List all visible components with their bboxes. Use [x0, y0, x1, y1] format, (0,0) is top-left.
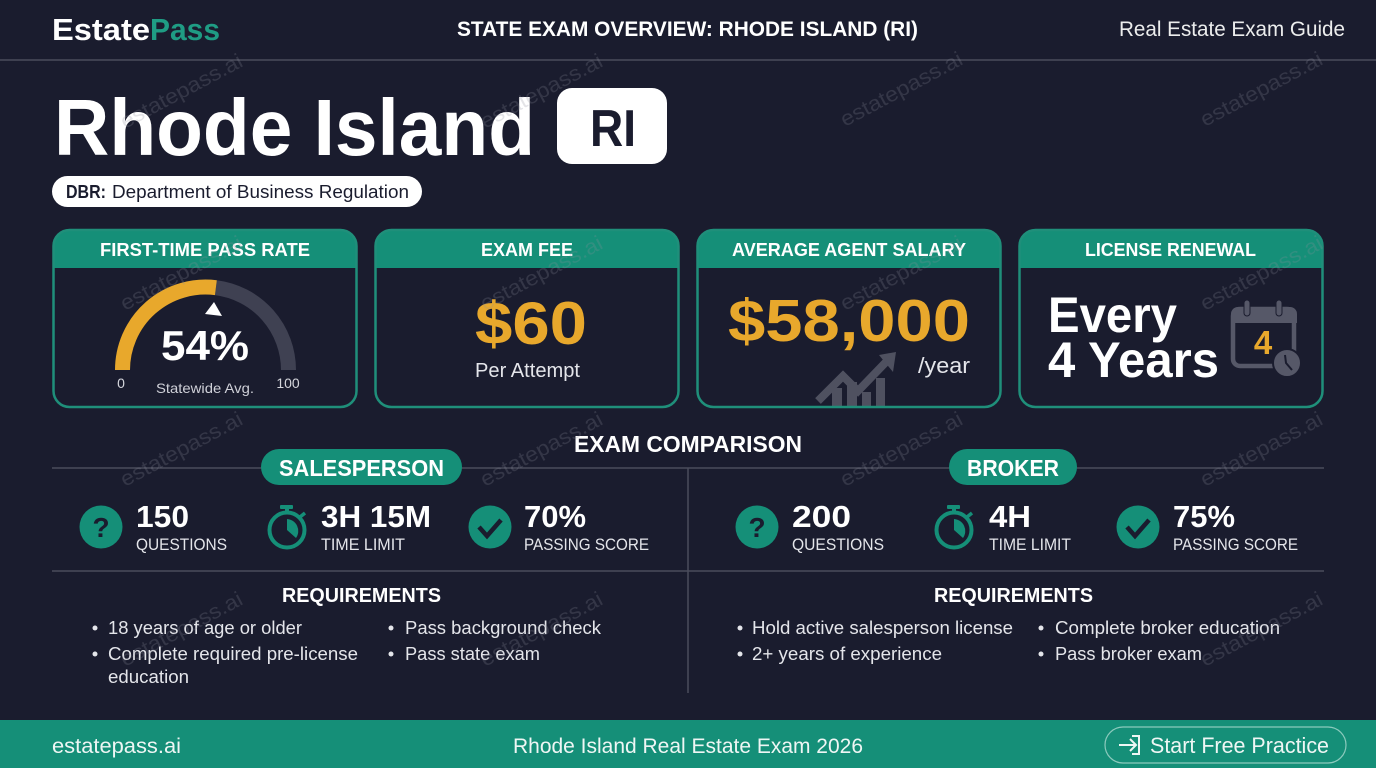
- state title: Rhode Island: [54, 83, 535, 172]
- stat: time limit: TIME LIMIT: [321, 535, 405, 554]
- panel heading: LICENSE RENEWAL: [1085, 240, 1256, 260]
- requirements list: Pass background check: [405, 618, 602, 638]
- watermarks: estatepass.ai: [117, 50, 247, 133]
- salesperson pill: [261, 449, 462, 485]
- gauge: Statewide Avg.: [156, 380, 254, 396]
- watermarks: estatepass.ai: [477, 232, 607, 315]
- button: start free practice: [1105, 727, 1346, 763]
- stat: time limit: TIME LIMIT: [989, 535, 1071, 554]
- stat: passing score: PASSING SCORE: [524, 535, 649, 554]
- state code badge: [557, 88, 667, 164]
- requirements list: education: [108, 667, 189, 687]
- salary unit: /year: [918, 353, 970, 378]
- icon: check: [1116, 506, 1160, 548]
- requirements list: 18 years of age or older: [108, 618, 302, 638]
- stat: time limit: 4H: [989, 499, 1031, 534]
- footer bar: [0, 720, 1376, 768]
- stat: time limit: [989, 499, 1071, 554]
- gauge: 54%: [161, 322, 249, 369]
- requirements list: Pass state exam: [405, 644, 540, 664]
- logo: Estate: [52, 12, 150, 47]
- footer site: estatepass.ai: [52, 735, 181, 758]
- header guide label: Real Estate Exam Guide: [1119, 18, 1345, 41]
- requirements list: [738, 618, 1280, 664]
- panel heading: EXAM FEE: [481, 240, 573, 260]
- panel: first-time pass rate: [54, 230, 356, 407]
- watermarks: estatepass.ai: [1197, 48, 1327, 131]
- panel heading: AVERAGE AGENT SALARY: [732, 240, 966, 260]
- requirements list: [92, 618, 602, 687]
- broker pill: [949, 449, 1077, 485]
- gauge: 100: [276, 375, 300, 391]
- agency pill: DBR:: [66, 182, 106, 202]
- header title: STATE EXAM OVERVIEW: RHODE ISLAND (RI): [457, 18, 918, 41]
- requirements heading: REQUIREMENTS: [282, 585, 441, 607]
- gauge: 0: [117, 375, 125, 391]
- requirements list: Complete required pre-license: [108, 644, 358, 664]
- watermarks: estatepass.ai: [117, 588, 247, 671]
- broker pill: BROKER: [967, 455, 1059, 481]
- logo: Pass: [150, 12, 220, 47]
- salary amount: $58,000: [728, 288, 970, 354]
- requirements list: 2+ years of experience: [752, 644, 942, 664]
- fee unit: Per Attempt: [475, 360, 580, 382]
- watermarks: estatepass.ai: [477, 50, 607, 133]
- watermarks: [117, 48, 1327, 671]
- watermarks: estatepass.ai: [1197, 588, 1327, 671]
- watermarks: estatepass.ai: [477, 588, 607, 671]
- icon: question: ?: [92, 512, 110, 543]
- watermarks: estatepass.ai: [477, 408, 607, 491]
- icon: calendar with clock: [1231, 300, 1301, 377]
- panel: license renewal: [1020, 230, 1322, 407]
- stat: questions: 200: [792, 499, 851, 534]
- icon: rising chart: [818, 352, 896, 406]
- stat: passing score: [524, 499, 649, 554]
- icon: stopwatch: [270, 505, 305, 548]
- watermarks: estatepass.ai: [1197, 408, 1327, 491]
- stat: questions: QUESTIONS: [136, 535, 227, 554]
- salesperson pill: SALESPERSON: [279, 455, 444, 481]
- watermarks: estatepass.ai: [1197, 232, 1327, 315]
- icon: check: [468, 506, 512, 548]
- watermarks: estatepass.ai: [837, 408, 967, 491]
- watermarks: estatepass.ai: [117, 408, 247, 491]
- requirements list: Pass broker exam: [1055, 644, 1202, 664]
- header bar: [52, 12, 1345, 47]
- stat: passing score: 70%: [524, 499, 586, 534]
- watermarks: estatepass.ai: [117, 232, 247, 315]
- requirements list: Complete broker education: [1055, 618, 1280, 638]
- panel: exam fee: [376, 230, 678, 407]
- panel heading: FIRST-TIME PASS RATE: [100, 240, 310, 260]
- stat: questions: QUESTIONS: [792, 535, 884, 554]
- agency pill: [52, 176, 422, 207]
- stat: time limit: [321, 499, 431, 554]
- panel: salesperson: [80, 449, 649, 687]
- agency pill: Department of Business Regulation: [112, 182, 409, 202]
- stat: questions: [136, 499, 227, 554]
- requirements list: Hold active salesperson license: [752, 618, 1013, 638]
- stat: time limit: 3H 15M: [321, 499, 431, 534]
- watermarks: estatepass.ai: [837, 48, 967, 131]
- footer title: Rhode Island Real Estate Exam 2026: [513, 735, 863, 758]
- logo: [52, 12, 220, 47]
- state code badge: RI: [590, 100, 636, 158]
- button: start free practice: Start Free Practice: [1150, 733, 1329, 758]
- panel: broker: [736, 449, 1298, 664]
- stat: passing score: PASSING SCORE: [1173, 535, 1298, 554]
- icon: question: [80, 506, 122, 548]
- renewal period: 4 Years: [1048, 332, 1219, 388]
- icon: question: ?: [748, 512, 766, 543]
- fee amount: $60: [475, 290, 587, 357]
- stat: questions: [792, 499, 884, 554]
- icon: arrow: [1119, 736, 1139, 754]
- renewal period: Every: [1048, 287, 1177, 343]
- requirements heading: REQUIREMENTS: [934, 585, 1093, 607]
- gauge: [117, 287, 300, 396]
- watermarks: estatepass.ai: [837, 232, 967, 315]
- stat: passing score: 75%: [1173, 499, 1235, 534]
- stat: passing score: [1173, 499, 1298, 554]
- renewal period: [1048, 287, 1219, 388]
- icon: question: [736, 506, 778, 548]
- section heading: exam comparison: EXAM COMPARISON: [574, 431, 802, 457]
- icon: calendar with clock: 4: [1254, 324, 1273, 361]
- stat: questions: 150: [136, 499, 189, 534]
- icon: stopwatch: [936, 505, 972, 548]
- panel: average agent salary: [698, 230, 1000, 407]
